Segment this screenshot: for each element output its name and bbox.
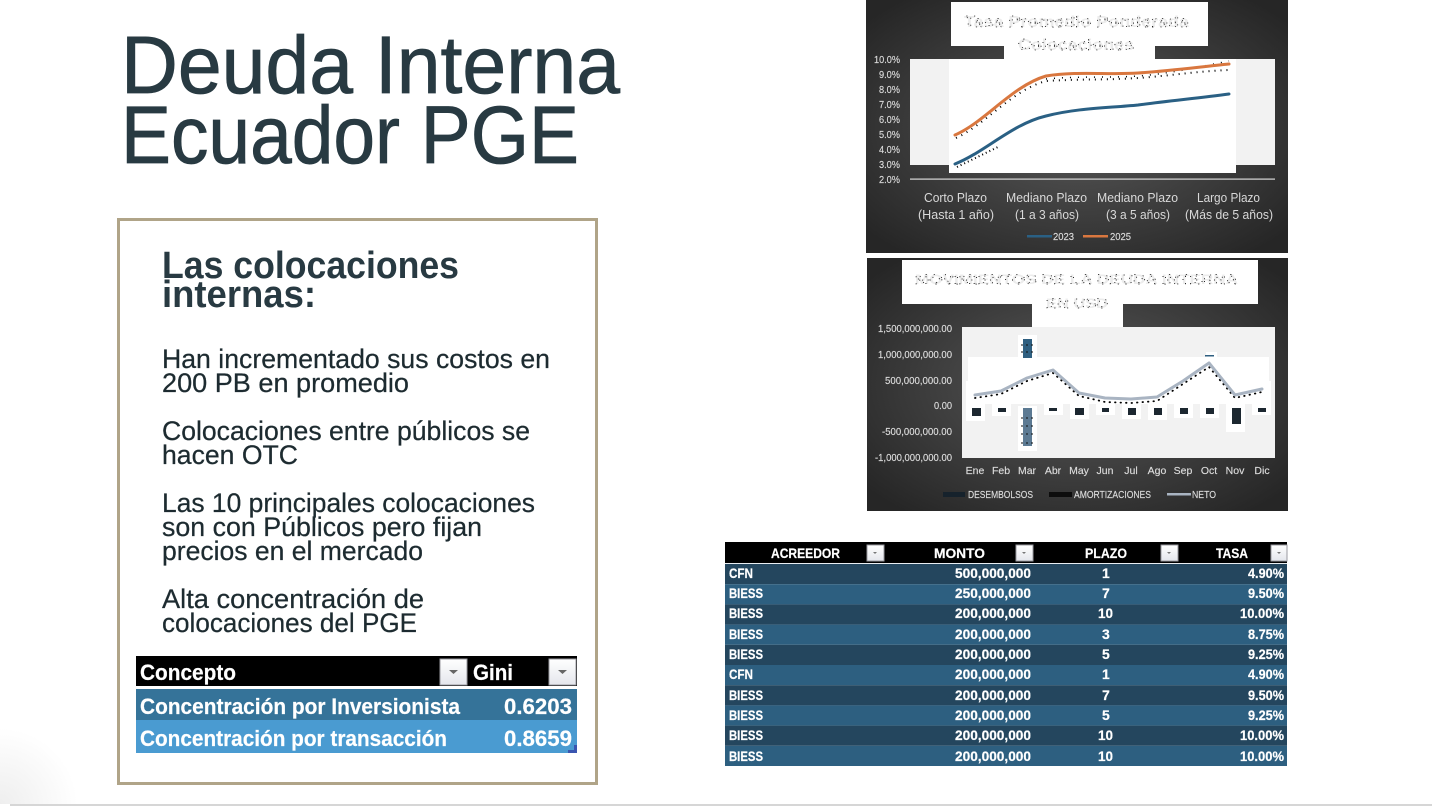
y axis labels: 7.0%: [879, 99, 900, 111]
icon: filtro concepto: [440, 659, 467, 685]
table rows: 9.50%: [1248, 585, 1284, 601]
y axis labels: 8.0%: [879, 84, 900, 96]
table rows: BIESS: [729, 748, 763, 764]
table rows: BIESS: [729, 626, 763, 642]
text block: principales colocaciones: Las 10 principales colocaciones: [162, 488, 535, 518]
legend: NETO: [1192, 489, 1216, 501]
y axis labels: 2.0%: [879, 174, 900, 186]
chart title: EN USD: [1046, 295, 1108, 311]
text block: principales colocaciones: son con Públicos pero fijan: [162, 512, 482, 542]
month labels: Nov: [1226, 465, 1245, 477]
y axis labels: 9.0%: [879, 69, 900, 81]
month labels: Abr: [1045, 465, 1062, 477]
title: [121, 20, 620, 181]
legend: DESEMBOLSOS: [968, 489, 1033, 501]
table rows: 10.00%: [1240, 605, 1285, 621]
table rows: 4.90%: [1248, 565, 1284, 581]
table rows: 200,000,000: [955, 707, 1031, 723]
table: principales colocaciones: [725, 542, 1287, 766]
category labels: [918, 190, 1273, 222]
category labels: (Hasta 1 año): [918, 207, 994, 222]
table rows: 500,000,000: [955, 565, 1031, 581]
y axis labels: 10.0%: [874, 54, 900, 66]
table rows: CFN: [729, 666, 753, 682]
month labels: Mar: [1018, 465, 1037, 477]
legend: 2023: [1053, 231, 1074, 243]
category labels: Mediano Plazo: [1006, 190, 1087, 205]
category labels: Corto Plazo: [924, 190, 987, 205]
table rows: 1: [1102, 666, 1110, 682]
y axis labels: 1,000,000,000.00: [878, 349, 952, 361]
chart title: MOVIMIENTOS DE LA DEUDA INTERNA: [915, 271, 1238, 287]
month labels: [966, 465, 1270, 477]
y axis labels: -1,000,000,000.00: [875, 452, 952, 464]
legend: [1027, 231, 1131, 243]
table: gini: [136, 656, 577, 753]
table rows: 10.00%: [1240, 748, 1285, 764]
month labels: Dic: [1254, 465, 1270, 477]
table rows: 1: [1102, 565, 1110, 581]
text block: colocaciones OTC: hacen OTC: [162, 440, 298, 470]
table: gini: Concentración por transacción: [140, 726, 447, 751]
heading: las colocaciones internas: internas:: [162, 274, 316, 316]
month labels: Feb: [992, 465, 1010, 477]
bars: desembolsos y amortizaciones: [966, 335, 1271, 451]
legend: 2025: [1110, 231, 1131, 243]
category labels: Largo Plazo: [1197, 190, 1260, 205]
table rows: CFN: [729, 565, 753, 581]
table rows: 250,000,000: [955, 585, 1031, 601]
chart title: [915, 271, 1238, 311]
text block: incremento de costos: 200 PB en promedio: [162, 368, 409, 398]
chart title: Colocaciones: [1018, 37, 1134, 54]
table rows: 4.90%: [1248, 666, 1284, 682]
table rows: 200,000,000: [955, 626, 1031, 642]
table header: TASA: [1216, 545, 1248, 561]
table rows: BIESS: [729, 687, 763, 703]
text block: alta concentracion: [162, 584, 424, 638]
text block: incremento de costos: Han incrementado sus costos en: [162, 344, 550, 374]
table rows: 9.25%: [1248, 646, 1284, 662]
table: gini: Gini: [473, 660, 513, 685]
table rows: 200,000,000: [955, 727, 1031, 743]
table rows: [725, 563, 1287, 766]
text block: colocaciones OTC: Colocaciones entre públicos se: [162, 416, 530, 446]
table rows: 10: [1098, 727, 1113, 743]
table rows: 200,000,000: [955, 748, 1031, 764]
month labels: Jul: [1124, 465, 1138, 477]
table rows: 9.25%: [1248, 707, 1284, 723]
heading: las colocaciones internas: [162, 245, 459, 316]
table rows: 5: [1102, 707, 1110, 723]
table: gini: 0.6203: [504, 694, 572, 719]
table header: ACREEDOR: [771, 545, 840, 561]
table header: [725, 542, 1287, 563]
heading: las colocaciones internas: Las colocaciones: [162, 245, 459, 287]
table rows: BIESS: [729, 605, 763, 621]
month labels: Jun: [1097, 465, 1114, 477]
y axis labels: [875, 323, 952, 464]
table: gini: 0.8659: [504, 726, 572, 751]
legend: [943, 489, 1216, 501]
text block: incremento de costos: [162, 344, 550, 398]
line: 2025: [955, 61, 1229, 138]
category labels: Mediano Plazo: [1097, 190, 1178, 205]
table rows: 10: [1098, 748, 1113, 764]
table rows: BIESS: [729, 646, 763, 662]
y axis labels: 1,500,000,000.00: [878, 323, 952, 335]
month labels: Sep: [1174, 465, 1192, 477]
table: gini: Concepto: [140, 660, 236, 685]
y axis labels: 3.0%: [879, 159, 900, 171]
title: Deuda Interna: [121, 20, 620, 111]
table rows: 200,000,000: [955, 666, 1031, 682]
month labels: Oct: [1201, 465, 1217, 477]
table rows: 7: [1102, 687, 1110, 703]
table rows: 3: [1102, 626, 1110, 642]
table: gini: Concentración por Inversionista: [140, 694, 461, 719]
text block: principales colocaciones: precios en el mercado: [162, 536, 423, 566]
table rows: 200,000,000: [955, 646, 1031, 662]
y axis labels: 500,000,000.00: [885, 375, 952, 387]
y axis labels: -500,000,000.00: [882, 426, 952, 438]
table rows: 5: [1102, 646, 1110, 662]
table rows: 10: [1098, 605, 1113, 621]
text block: alta concentracion: Alta concentración de: [162, 584, 424, 614]
y axis labels: 4.0%: [879, 144, 900, 156]
line: neto: [975, 363, 1262, 403]
legend: AMORTIZACIONES: [1074, 489, 1151, 501]
table header: MONTO: [934, 545, 985, 561]
table rows: BIESS: [729, 707, 763, 723]
y axis labels: 0.00: [934, 400, 952, 412]
category labels: (Más de 5 años): [1185, 207, 1273, 222]
y axis labels: [874, 54, 900, 186]
table rows: 7: [1102, 585, 1110, 601]
table rows: 10.00%: [1240, 727, 1285, 743]
category labels: (1 a 3 años): [1015, 207, 1079, 222]
text block: alta concentracion: colocaciones del PGE: [162, 608, 417, 638]
y axis labels: 6.0%: [879, 114, 900, 126]
table header: PLAZO: [1085, 545, 1127, 561]
chart title: Tasa Promedio Ponderada: [964, 14, 1189, 31]
month labels: Ene: [966, 465, 984, 477]
line: 2023: [955, 94, 1229, 167]
table rows: 9.50%: [1248, 687, 1284, 703]
chart title: [964, 14, 1189, 54]
y axis labels: 5.0%: [879, 129, 900, 141]
text block: principales colocaciones: [162, 488, 535, 566]
table rows: 200,000,000: [955, 687, 1031, 703]
table rows: BIESS: [729, 585, 763, 601]
title: Ecuador PGE: [121, 90, 579, 181]
month labels: Ago: [1148, 465, 1166, 477]
text block: colocaciones OTC: [162, 416, 530, 470]
table rows: 8.75%: [1248, 626, 1284, 642]
table rows: 200,000,000: [955, 605, 1031, 621]
panel: las colocaciones internas: [118, 220, 596, 784]
table rows: BIESS: [729, 727, 763, 743]
chart: tasa promedio ponderada: [866, 0, 1288, 253]
chart: movimientos de la deuda interna: [867, 258, 1288, 511]
category labels: (3 a 5 años): [1106, 207, 1170, 222]
month labels: May: [1069, 465, 1090, 477]
icon: filtro gini: [549, 659, 576, 685]
